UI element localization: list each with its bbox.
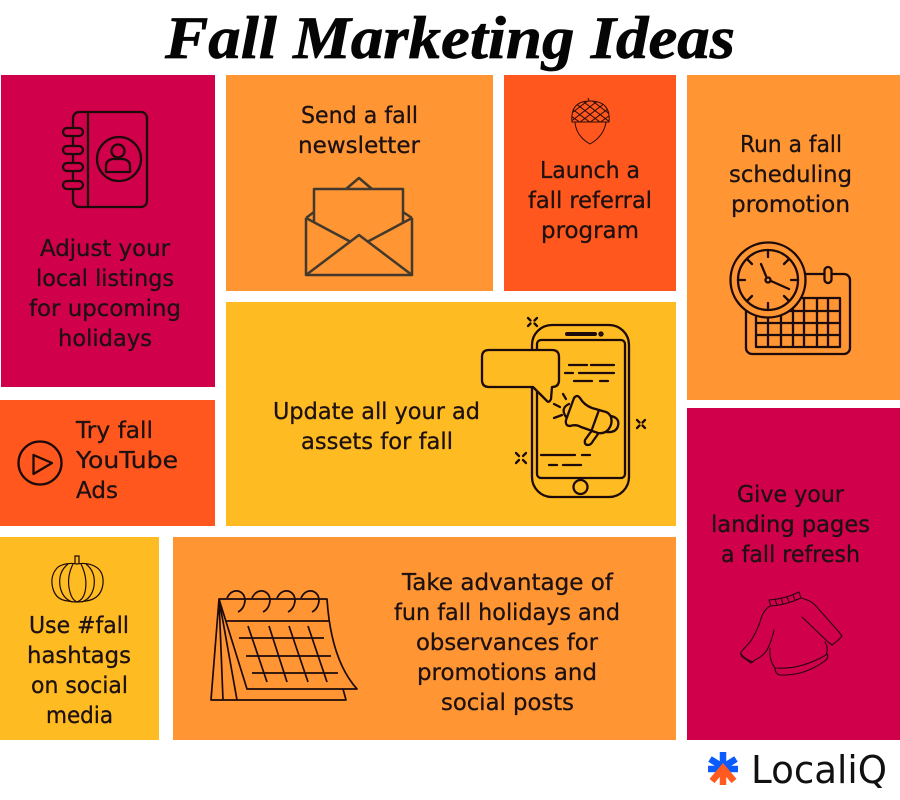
text: YouTube ads: Try fall — [75, 418, 153, 444]
text: landing pages: a fall refresh — [721, 542, 860, 568]
icon: address book — [63, 112, 147, 207]
icon: sweater — [741, 592, 842, 675]
text: YouTube ads: Ads — [76, 478, 118, 504]
text: YouTube ads: YouTube — [75, 448, 178, 474]
text: hashtags — [27, 613, 131, 729]
panel: newsletter — [226, 75, 493, 291]
title: Fall Marketing Ideas — [164, 5, 735, 71]
logo: LocaliQ — [708, 748, 887, 792]
text: local listings: local listings — [36, 266, 174, 292]
icon: pumpkin — [52, 556, 103, 602]
text: ad assets: Update all your ad — [273, 399, 480, 425]
panel: ad assets — [226, 302, 676, 526]
text: holidays: observances for — [416, 630, 599, 656]
text: referral: fall referral — [528, 188, 652, 214]
text: scheduling: scheduling — [729, 162, 852, 188]
text: hashtags: hashtags — [27, 643, 131, 669]
text: newsletter — [298, 103, 421, 159]
text: holidays — [394, 570, 620, 716]
text: referral: program — [541, 218, 639, 244]
text: referral — [528, 158, 652, 244]
text: scheduling: Run a fall — [740, 132, 842, 158]
panel: referral — [504, 75, 676, 291]
text: holidays: Take advantage of — [401, 570, 614, 596]
text: scheduling — [729, 132, 852, 218]
text: local listings: for upcoming — [29, 296, 181, 322]
icon: clock and calendar — [730, 242, 850, 354]
panel: scheduling — [687, 75, 900, 400]
text: holidays: fun fall holidays and — [394, 600, 620, 626]
icon: LocaliQ asterisk — [708, 752, 738, 785]
text: local listings: holidays — [58, 326, 152, 352]
text: hashtags: Use #fall — [29, 613, 129, 639]
text: landing pages — [711, 482, 870, 568]
text: landing pages: Give your — [737, 482, 845, 508]
panel: holidays — [173, 537, 676, 740]
icon: wall calendar — [211, 591, 357, 700]
text: referral: Launch a — [540, 158, 640, 184]
icon: envelope — [306, 178, 412, 275]
text: holidays: social posts — [441, 690, 574, 716]
icon: phone with megaphone — [482, 318, 645, 497]
wordmark: LocaliQ — [751, 748, 887, 792]
panel: hashtags — [0, 537, 159, 740]
text: local listings: Adjust your — [40, 236, 171, 262]
text: hashtags: media — [46, 703, 113, 729]
text: scheduling: promotion — [731, 192, 850, 218]
text: ad assets: assets for fall — [301, 429, 453, 455]
text: YouTube ads — [75, 418, 178, 504]
text: landing pages: landing pages — [711, 512, 870, 538]
text: ad assets — [273, 399, 480, 455]
text: local listings — [29, 236, 181, 352]
icon: play button — [18, 442, 62, 484]
text: newsletter: newsletter — [298, 133, 421, 159]
icon: acorn — [571, 98, 610, 144]
text: hashtags: on social — [31, 673, 128, 699]
panel: landing pages — [687, 408, 900, 740]
panel: YouTube ads — [0, 400, 215, 526]
panel: local listings — [1, 75, 215, 387]
text: holidays: promotions and — [417, 660, 597, 686]
text: newsletter: Send a fall — [301, 103, 418, 129]
